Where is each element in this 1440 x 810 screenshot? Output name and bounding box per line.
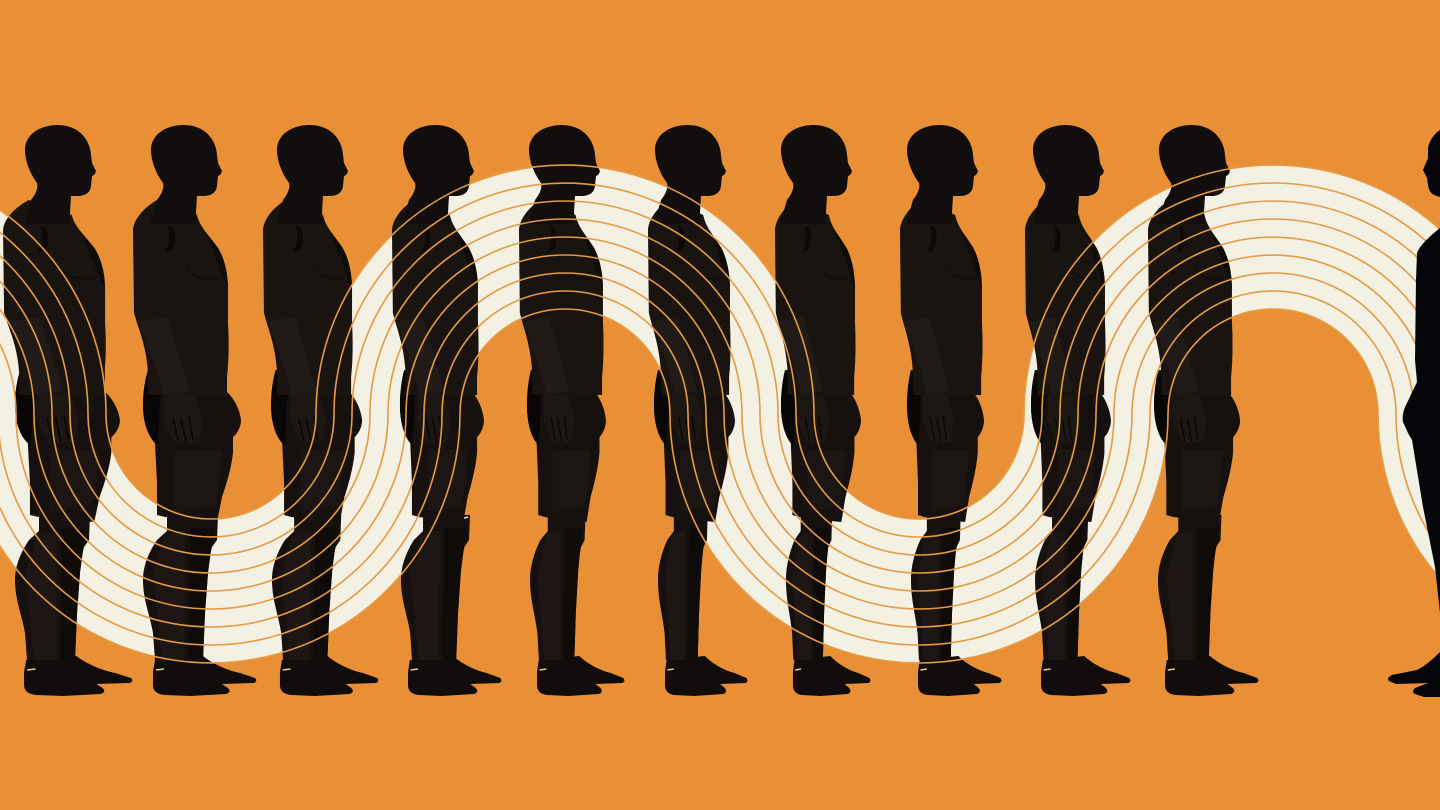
figure 3 [263,125,378,696]
figure 10 [1148,125,1258,696]
figure 11: black silhouette facing left at right edge [1388,125,1440,697]
figure 9 [1025,125,1130,696]
cream wave band [0,237,1440,591]
figure 1 [3,125,132,696]
figure 6 [648,125,747,696]
concentric wave lines [0,165,1440,663]
figure 2 [133,125,256,696]
figure 5 [519,125,624,696]
figure 4 [392,125,501,696]
figure 7 [775,125,870,696]
figure 8 [900,125,1001,696]
